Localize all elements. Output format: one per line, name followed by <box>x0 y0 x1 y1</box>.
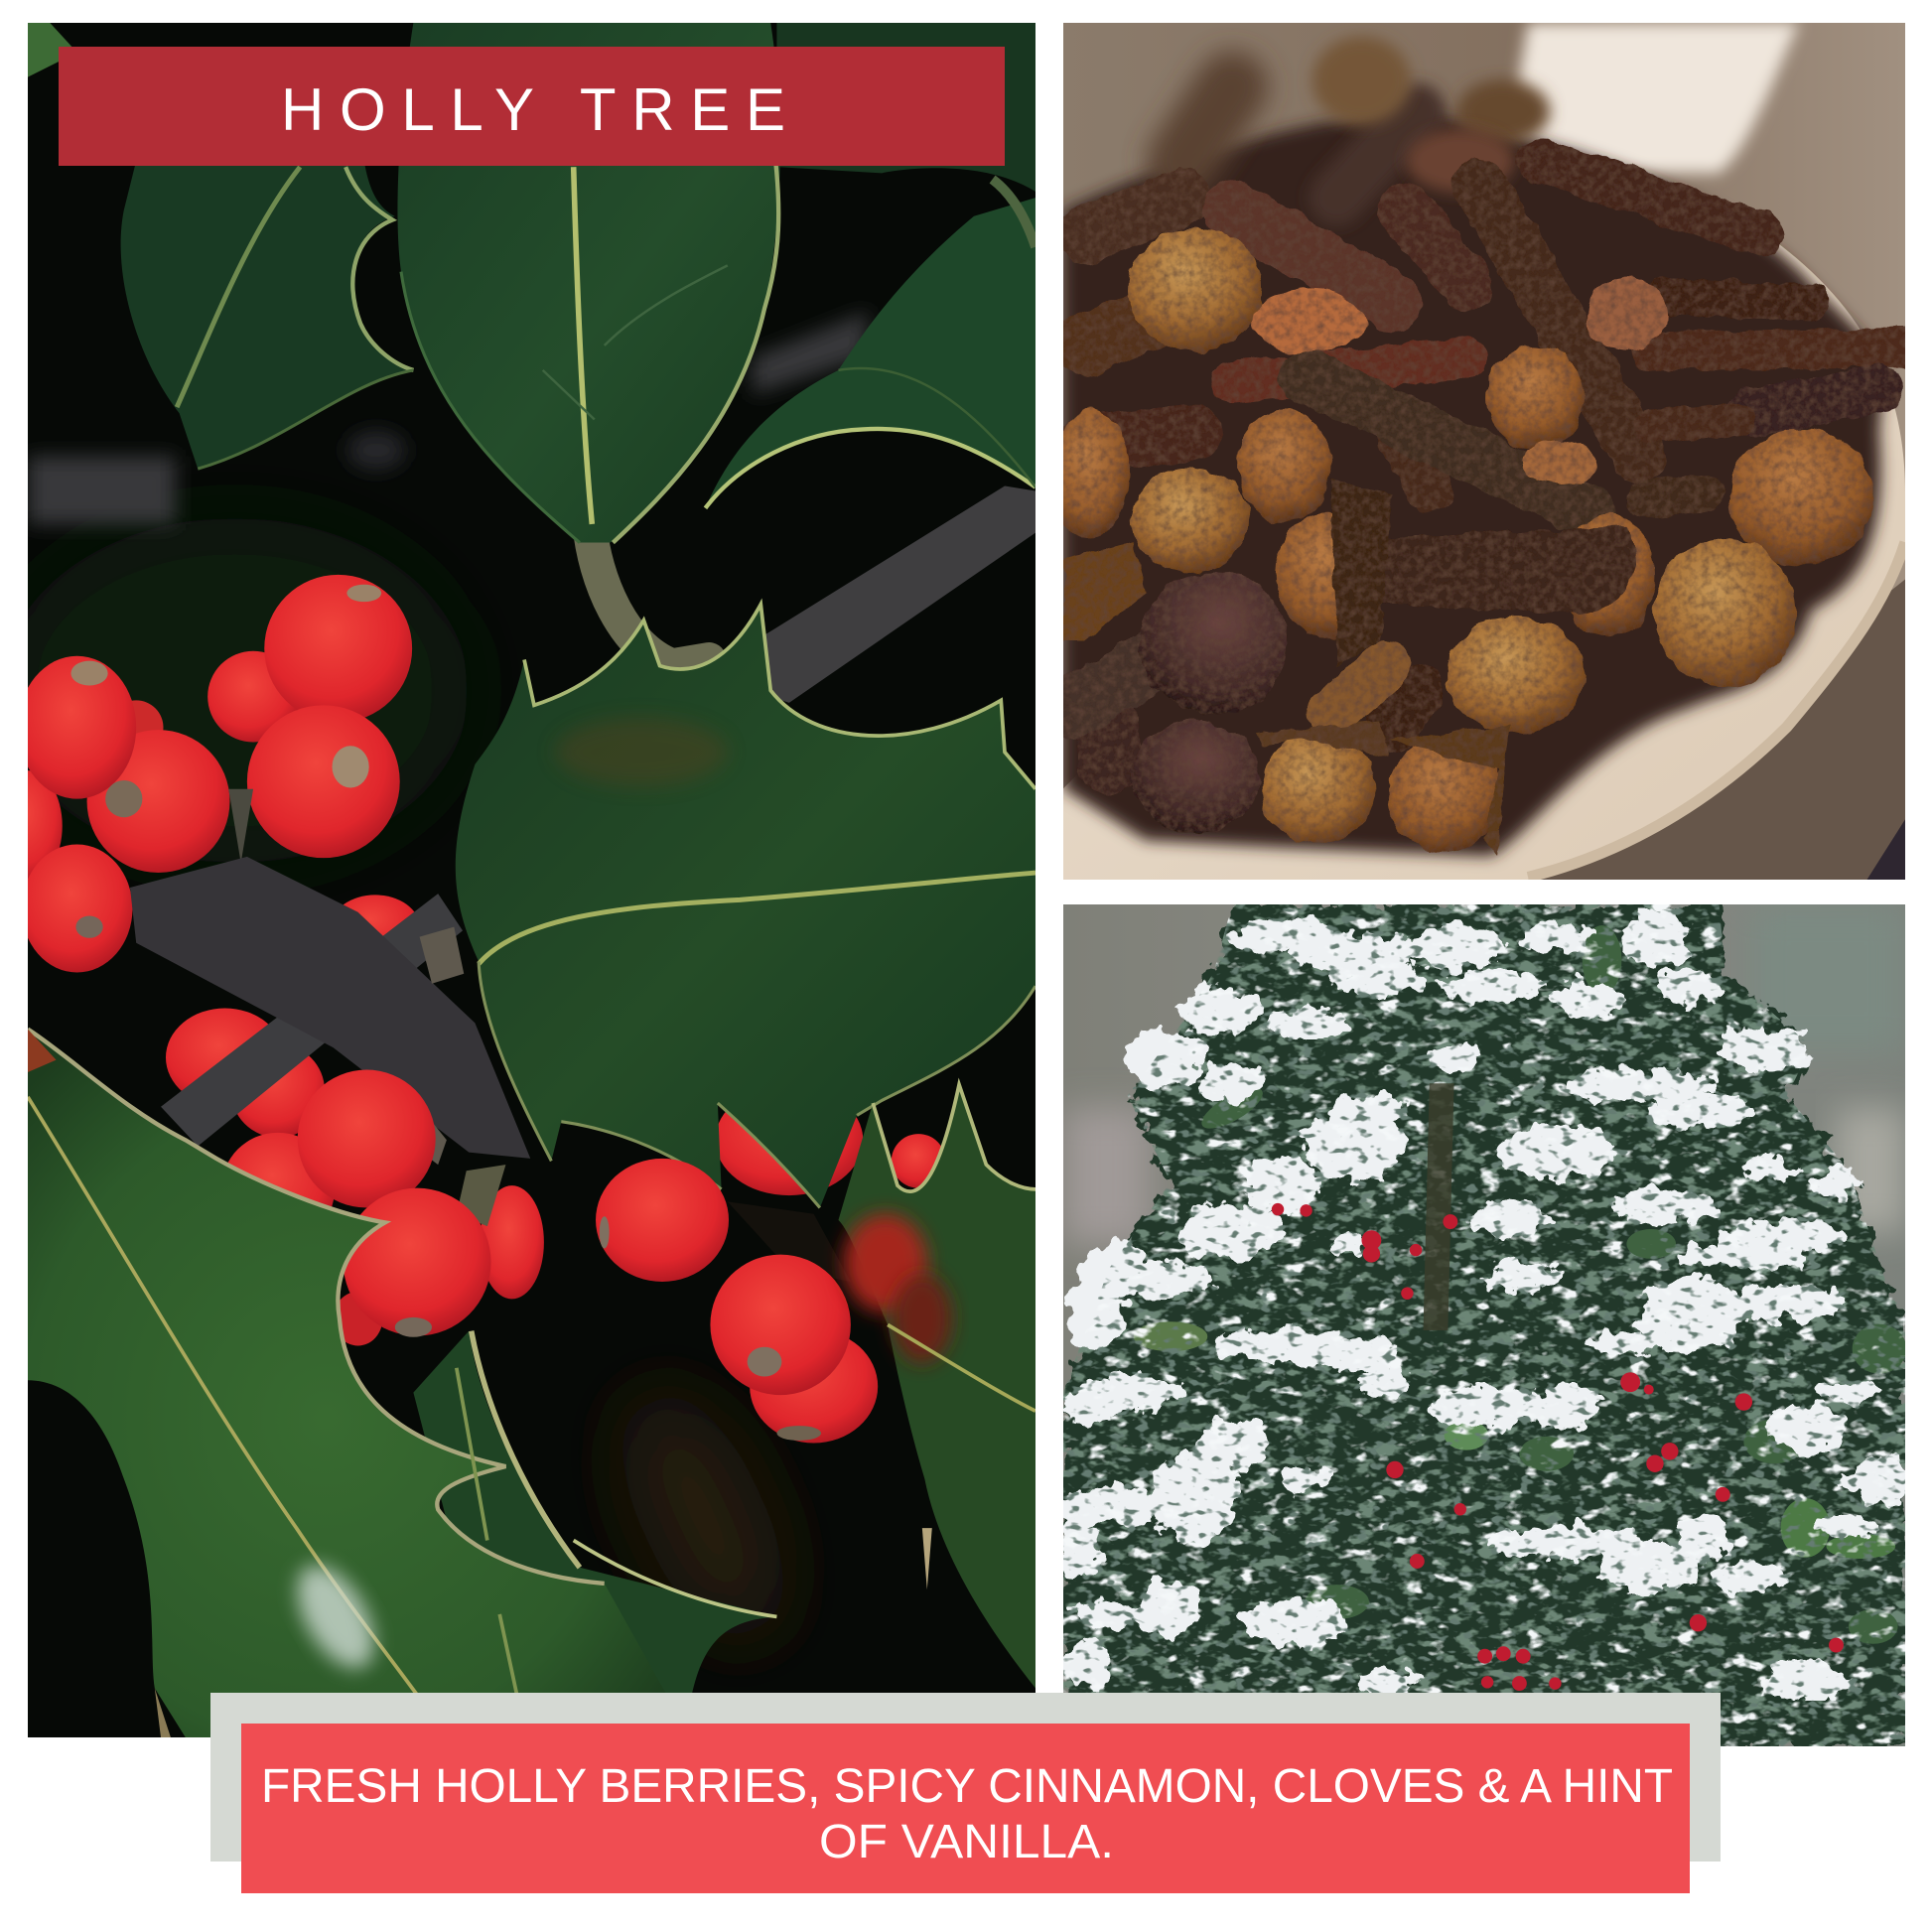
clove stems <box>1072 161 1905 763</box>
background blur <box>1 23 869 1665</box>
clove buds <box>1051 228 1873 856</box>
berries behind lower branches <box>166 1009 544 1299</box>
caption panel <box>241 1724 1690 1893</box>
wooden table background <box>1063 23 1905 880</box>
caption text: OF VANILLA. <box>819 1816 1114 1868</box>
green leaves <box>1134 925 1906 1644</box>
caption text: FRESH HOLLY BERRIES, SPICY CINNAMON, CLOVES & A HINT <box>261 1760 1673 1813</box>
dark foliage flecks <box>1063 904 1905 1746</box>
caption backing panel <box>210 1693 1721 1862</box>
clove heap shadow mass <box>1063 111 1885 856</box>
gray branch upper right <box>703 485 1035 703</box>
red berries on tree <box>1272 1203 1844 1691</box>
title banner <box>59 47 1005 166</box>
red berries group upper left <box>0 575 420 973</box>
holly leaf lower right <box>838 1084 1035 1688</box>
photo: holly leaves and red berries <box>28 23 1035 1737</box>
spoon <box>1063 23 1905 880</box>
caption text <box>261 1760 1673 1868</box>
red berries group right <box>596 1134 945 1443</box>
out of focus rear cloves <box>1182 37 1550 198</box>
holly leaf center with spines <box>456 605 1035 1208</box>
red berries group center <box>298 1070 491 1345</box>
back leaves <box>121 23 1035 508</box>
center oval leaf and stalk <box>397 23 780 666</box>
misty background <box>1063 904 1905 1746</box>
holly leaf lower left <box>28 1030 776 1737</box>
mid green foliage texture <box>1063 904 1905 1746</box>
dark branches <box>130 857 530 1226</box>
tree foliage <box>1063 904 1905 1746</box>
dappled snow texture <box>1063 904 1905 1746</box>
photo: snow-covered holly tree <box>1063 904 1905 1746</box>
trunk <box>1424 1083 1454 1330</box>
photo: cloves on wooden spoon <box>1063 23 1905 880</box>
title text: HOLLY TREE <box>281 76 785 143</box>
snow on branches <box>1058 908 1914 1701</box>
